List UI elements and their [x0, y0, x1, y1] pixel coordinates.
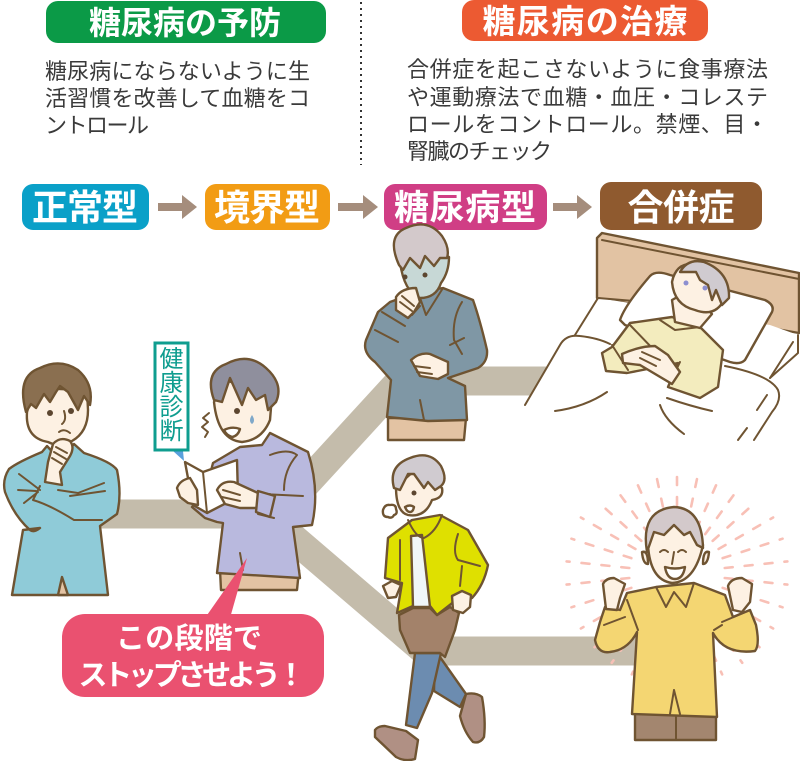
tag: health checkup [155, 343, 188, 461]
callout: stop at this stage: ストップさせよう！ [78, 659, 306, 692]
figure: man reading health checkup [177, 359, 315, 590]
figure: worried man with diabetes [365, 224, 487, 440]
arrow: normal to borderline [158, 195, 197, 219]
arrow: diabetes to complications [553, 195, 592, 219]
text block: treatment: 合併症を起こさないように食事療法 [407, 57, 768, 82]
text block: treatment [407, 57, 768, 164]
stage label: complications [600, 182, 762, 230]
heading: prevention: 糖尿病の予防 [89, 5, 281, 41]
figure: jogging man [375, 455, 488, 760]
stage label: complications: 合併症 [628, 187, 734, 228]
tag: health checkup: 健 [160, 346, 184, 373]
heading: prevention [46, 1, 326, 43]
progression paths [95, 381, 640, 651]
arrow: borderline to diabetes [338, 195, 378, 219]
callout: stop at this stage: この段階で [116, 622, 262, 655]
tag: health checkup: 診 [160, 394, 184, 421]
figure: cheerful healthy man [595, 507, 758, 740]
text block: prevention: ントロール [45, 113, 149, 138]
stage label: diabetes: 糖尿病型 [394, 189, 536, 228]
text block: treatment: 腎臓のチェック [407, 139, 552, 164]
text block: prevention: 活習慣を改善して血糖をコ [45, 86, 310, 111]
callout: stop at this stage [62, 558, 324, 697]
burst rays [567, 472, 787, 678]
tag: health checkup: 断 [160, 418, 184, 445]
text block: prevention [45, 59, 310, 138]
tag: health checkup: 康 [160, 370, 184, 397]
figure: man lying sick in bed [525, 233, 799, 440]
figure: healthy man thinking [4, 363, 120, 595]
text block: treatment: ロールをコントロール。禁煙、目・ [407, 112, 768, 137]
stage label: normal: 正常型 [32, 187, 138, 228]
stage label: borderline: 境界型 [214, 187, 320, 228]
text block: prevention: 糖尿病にならないように生 [45, 59, 310, 84]
heading: treatment: 糖尿病の治療 [482, 3, 688, 40]
dotted divider [360, 2, 362, 165]
text block: treatment: や運動療法で血糖・血圧・コレステ [407, 85, 768, 110]
